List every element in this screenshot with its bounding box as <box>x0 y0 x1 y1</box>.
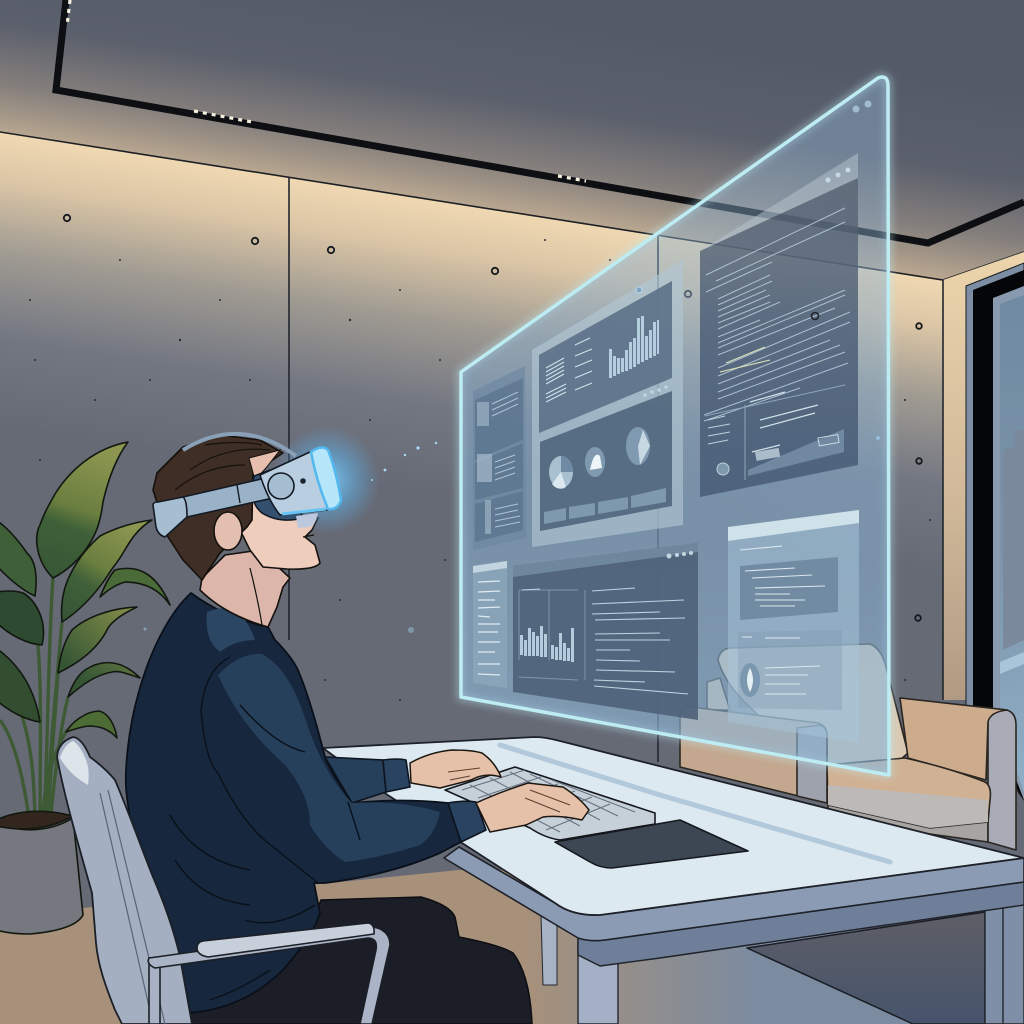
sofa far arm <box>707 678 730 710</box>
window <box>966 263 1024 800</box>
plant <box>0 442 170 934</box>
leaf upper right <box>62 520 152 622</box>
pot <box>0 818 83 934</box>
sofa seat <box>827 758 990 828</box>
chair armrest <box>148 923 390 1024</box>
desk apron <box>578 882 1024 966</box>
sofa back cushion <box>718 644 908 770</box>
lower visor glow <box>282 509 326 514</box>
headset body <box>260 447 340 515</box>
chair back <box>57 737 192 1024</box>
far hand <box>410 750 501 788</box>
message window <box>728 510 859 743</box>
far arm sleeve <box>325 757 386 803</box>
leaf left upper <box>0 520 36 596</box>
near hand <box>476 783 589 832</box>
leaf top <box>37 442 128 578</box>
analytics charts <box>520 626 574 662</box>
holographic display <box>461 77 889 775</box>
armrest pad <box>197 923 374 957</box>
far arm cuff <box>383 759 410 792</box>
sofa inner back <box>900 698 1007 780</box>
pot soil <box>0 811 73 829</box>
wall and ceiling edge line <box>0 132 1024 280</box>
wall fixtures and speckles <box>29 215 931 701</box>
dashboard buttons <box>544 488 666 524</box>
sofa seat front <box>828 785 988 828</box>
person <box>126 426 589 1024</box>
neck <box>200 550 290 627</box>
desk top <box>323 737 1024 915</box>
panel control dots <box>852 100 872 112</box>
shoulder highlight <box>207 608 255 652</box>
desk left leg <box>578 938 618 1024</box>
visor gasket <box>252 470 302 520</box>
sofa left arm side <box>797 725 827 803</box>
code window action bar <box>748 429 844 476</box>
chair strut <box>149 958 160 1024</box>
face <box>240 500 320 569</box>
wall fixture seen through panel <box>812 312 818 320</box>
hair <box>153 435 283 580</box>
chair back seams <box>100 790 165 1024</box>
sweater <box>126 593 461 1013</box>
armrest support tube <box>148 927 390 1024</box>
pie chart left <box>549 456 573 489</box>
code window avatar <box>717 463 729 475</box>
leaf left lower <box>0 648 40 722</box>
left column window <box>473 366 526 550</box>
sleeve highlight <box>218 654 440 862</box>
visor front glow <box>311 447 341 509</box>
ceiling <box>0 0 1024 280</box>
desk back leg <box>541 916 557 985</box>
ear <box>214 512 242 550</box>
dark space under desk <box>747 912 985 1024</box>
leaf left middle <box>0 591 44 645</box>
headset sensor <box>300 478 306 484</box>
gauge chart middle <box>585 447 605 477</box>
finger lines <box>448 768 570 812</box>
sofa left arm <box>680 707 827 803</box>
keyboard <box>445 767 655 840</box>
tablet <box>555 820 748 868</box>
dashboard bar chart <box>609 316 659 378</box>
side list window <box>473 561 507 688</box>
strap end pad <box>153 497 187 537</box>
central dashboard window <box>532 260 683 547</box>
headset knob <box>268 473 294 499</box>
nose under visor <box>296 513 318 528</box>
pie chart right <box>626 427 650 465</box>
leaf lower right <box>66 711 117 738</box>
headset strap <box>183 477 273 517</box>
corner line <box>942 280 944 700</box>
right side wall strip <box>943 252 1024 700</box>
strap divider <box>237 485 240 503</box>
headband <box>183 434 296 456</box>
dashboard text lines <box>546 338 592 402</box>
sweater fold lines <box>170 657 360 1000</box>
wall <box>0 132 943 920</box>
analytics window <box>513 543 698 720</box>
glass panel <box>461 77 889 775</box>
stems <box>0 578 68 825</box>
lips <box>303 535 314 537</box>
ceiling light trim <box>56 0 1024 243</box>
desk right leg <box>985 900 1024 1024</box>
near cuff <box>448 801 486 842</box>
neck tendon line <box>250 568 262 625</box>
sofa <box>680 644 1016 850</box>
leaf low right <box>68 663 140 697</box>
forehead <box>249 450 280 480</box>
trousers <box>170 897 532 1024</box>
leaf far right <box>100 568 170 605</box>
desk reflection stripe <box>500 745 890 862</box>
desk front edge <box>444 847 1024 941</box>
leaf mid right <box>58 607 137 673</box>
sofa right arm <box>900 698 1016 850</box>
chair <box>57 737 192 1024</box>
floor <box>0 870 1024 1024</box>
chair back highlight <box>60 741 89 785</box>
panel glow <box>461 77 889 775</box>
code window <box>700 153 858 497</box>
panel marker <box>636 287 642 293</box>
wall panel seams <box>289 178 658 762</box>
desk <box>323 737 1024 1024</box>
headset glow <box>272 426 380 534</box>
sofa base <box>828 790 988 842</box>
